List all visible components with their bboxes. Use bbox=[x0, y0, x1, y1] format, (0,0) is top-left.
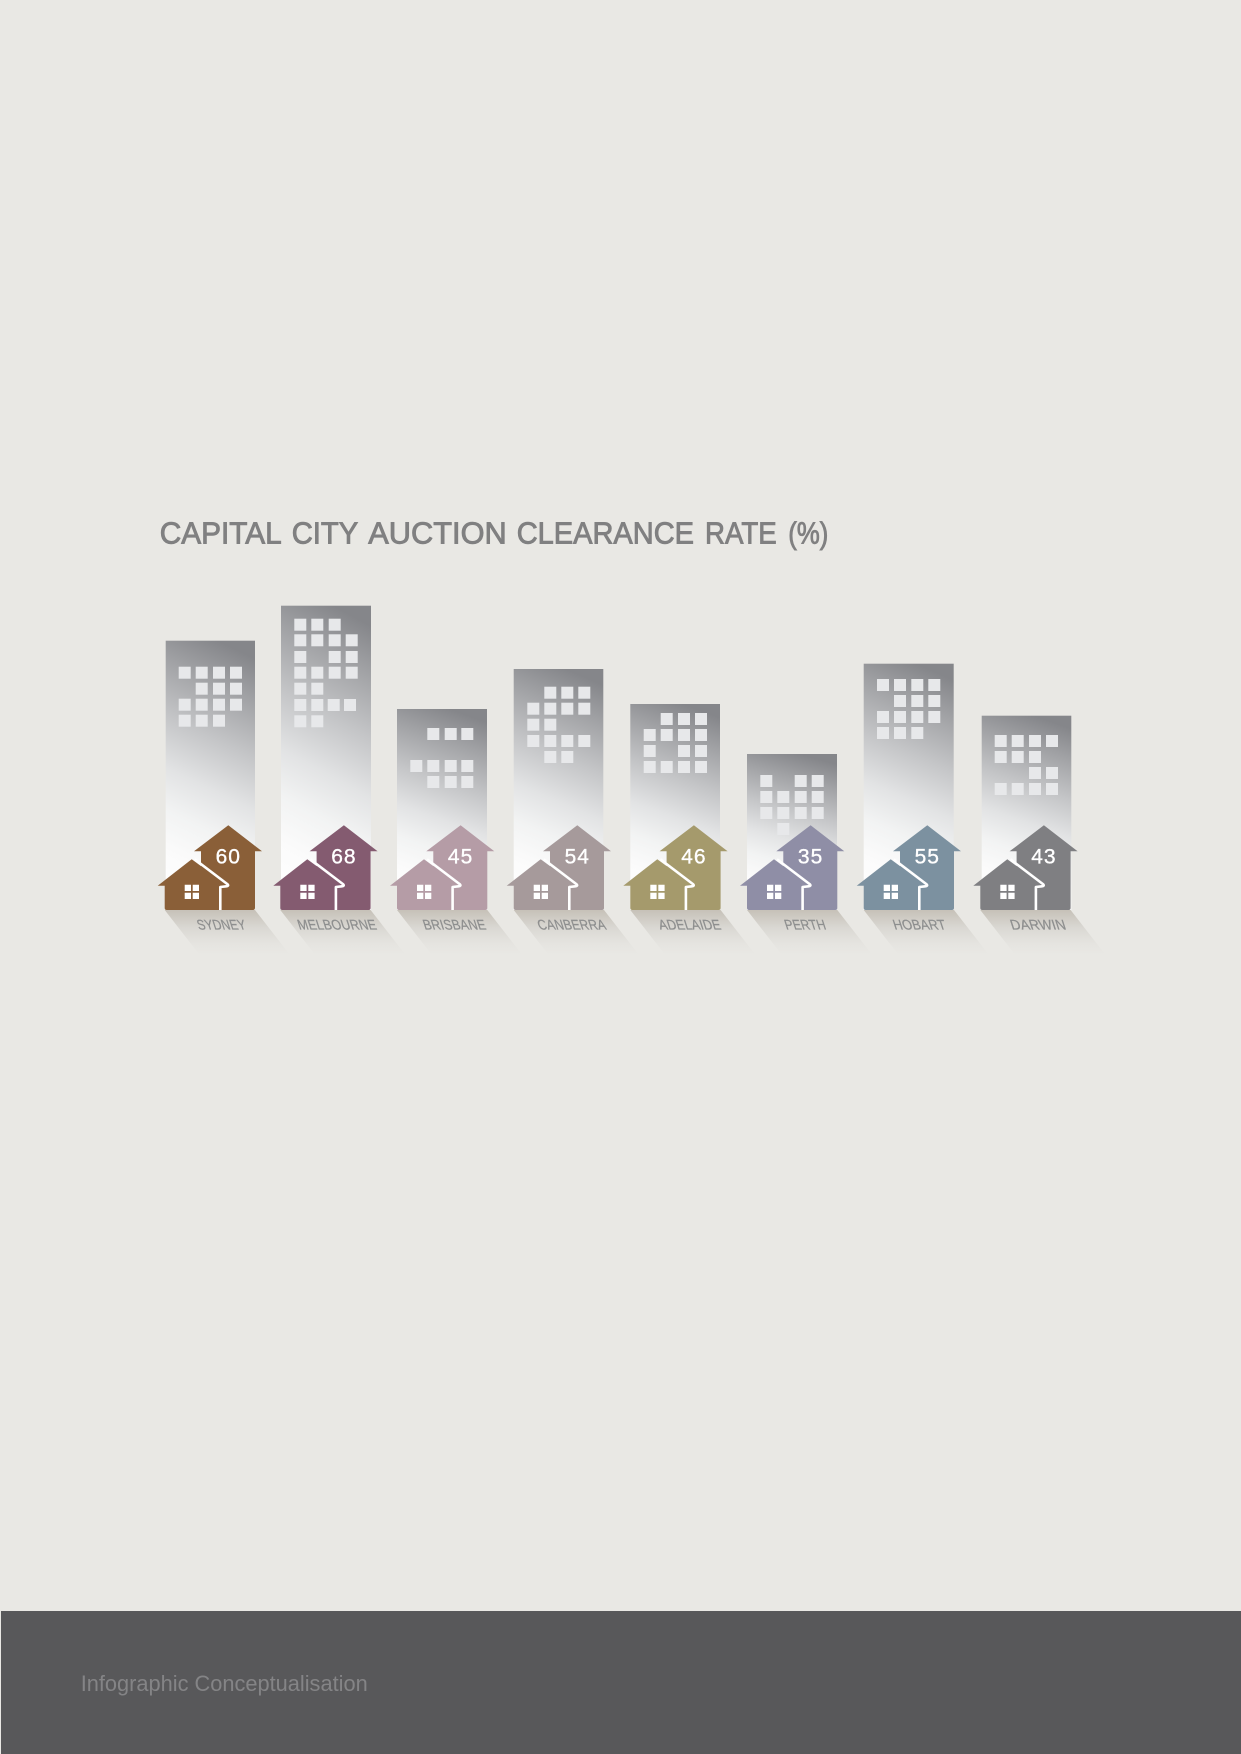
shadow: Brisbane bbox=[397, 910, 522, 955]
footer text: Infographic Conceptualisation bbox=[81, 1671, 368, 1696]
houses: Brisbane bbox=[390, 825, 494, 910]
building: Canberra bbox=[514, 669, 603, 910]
building: Perth bbox=[747, 754, 837, 910]
shadow: Canberra bbox=[514, 910, 639, 955]
city column: Brisbane 45 bbox=[390, 709, 522, 955]
windows: Perth bbox=[760, 775, 824, 835]
shadow: Perth bbox=[747, 910, 872, 955]
shadow: Adelaide bbox=[630, 910, 756, 955]
building: Darwin bbox=[982, 716, 1071, 910]
houses: Canberra: 54 bbox=[565, 845, 590, 868]
label: Melbourne: MELBOURNE bbox=[295, 918, 379, 933]
building: Adelaide bbox=[630, 704, 720, 910]
label: Adelaide: ADELAIDE bbox=[656, 918, 723, 933]
building: Melbourne bbox=[281, 606, 371, 910]
city column: Hobart 55 bbox=[857, 664, 989, 955]
title bbox=[160, 515, 828, 550]
title: AUCTION bbox=[368, 515, 507, 550]
label: Hobart: HOBART bbox=[891, 918, 948, 933]
windows: Sydney bbox=[179, 667, 242, 727]
city column: Perth 35 bbox=[740, 754, 872, 955]
houses: Hobart bbox=[857, 825, 961, 910]
title: CAPITAL bbox=[160, 515, 282, 550]
houses: Sydney: 60 bbox=[216, 845, 241, 868]
building: Brisbane bbox=[397, 709, 487, 910]
city column: Melbourne 68 bbox=[273, 606, 406, 955]
windows: Brisbane bbox=[410, 728, 473, 788]
label: Perth: PERTH bbox=[782, 918, 828, 933]
shadow: Melbourne bbox=[280, 910, 406, 955]
title: CITY bbox=[292, 515, 358, 550]
city column: Adelaide 46 bbox=[623, 704, 756, 955]
houses: Adelaide: 46 bbox=[681, 845, 707, 868]
label: Canberra: CANBERRA bbox=[535, 918, 609, 933]
label: Darwin: DARWIN bbox=[1008, 918, 1068, 933]
building: Hobart bbox=[864, 664, 954, 910]
houses: Sydney bbox=[158, 825, 262, 910]
shadow: Sydney bbox=[165, 910, 290, 955]
label: Sydney: SYDNEY bbox=[195, 918, 249, 933]
title: (%) bbox=[788, 515, 828, 550]
shadow: Hobart bbox=[864, 910, 989, 955]
building: Sydney bbox=[166, 641, 255, 910]
windows: Hobart bbox=[877, 679, 940, 739]
windows: Melbourne bbox=[294, 619, 358, 727]
label: Brisbane: BRISBANE bbox=[421, 918, 488, 933]
houses: Adelaide bbox=[623, 825, 728, 910]
city column: Darwin 43 bbox=[973, 716, 1106, 955]
city column: Canberra 54 bbox=[507, 669, 639, 955]
title: RATE bbox=[705, 515, 777, 550]
houses: Brisbane: 45 bbox=[448, 845, 473, 868]
houses: Melbourne: 68 bbox=[331, 845, 357, 868]
windows: Darwin bbox=[995, 735, 1058, 795]
houses: Darwin: 43 bbox=[1031, 845, 1057, 868]
title: CLEARANCE bbox=[517, 515, 694, 550]
windows: Adelaide bbox=[644, 713, 707, 773]
houses: Perth bbox=[740, 825, 844, 910]
shadow: Darwin bbox=[980, 910, 1106, 955]
houses: Canberra bbox=[507, 825, 611, 910]
footer band bbox=[1, 1611, 1241, 1754]
houses: Hobart: 55 bbox=[915, 845, 940, 868]
city column: Sydney 60 bbox=[158, 641, 290, 955]
houses: Perth: 35 bbox=[798, 845, 823, 868]
windows: Canberra bbox=[527, 687, 590, 763]
houses: Darwin bbox=[973, 825, 1078, 910]
houses: Melbourne bbox=[273, 825, 378, 910]
